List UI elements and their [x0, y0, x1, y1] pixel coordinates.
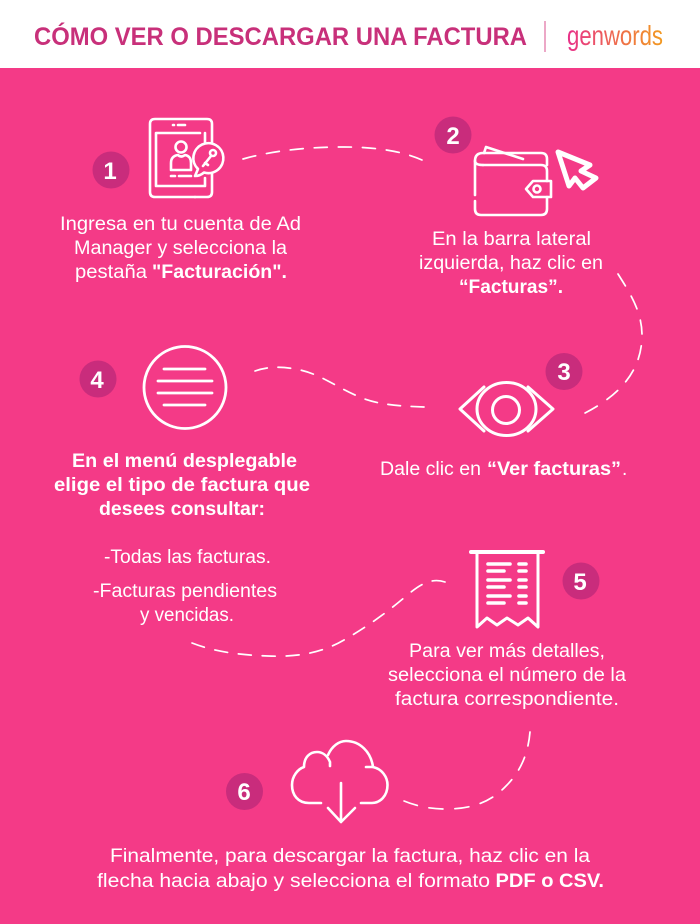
- text step 4 heading: En el menú desplegable: [72, 451, 297, 472]
- dashed connector 1 to 2: [243, 147, 422, 160]
- text step 6: Finalmente, para descargar la factura, haz clic en la: [110, 846, 590, 867]
- text step 4 list: -Todas las facturas.: [104, 547, 271, 568]
- step 4: [54, 346, 310, 626]
- icon: tablet with user and key: [150, 119, 223, 197]
- number badge 5: 5: [573, 569, 587, 596]
- number badge 1: [92, 152, 130, 188]
- title: CÓMO VER O DESCARGAR UNA FACTURA: [34, 21, 527, 51]
- text step 1: [60, 214, 301, 283]
- text step 2: izquierda, haz clic en: [419, 253, 603, 274]
- number badge 3: [546, 353, 582, 390]
- text step 6: [97, 846, 604, 892]
- dashed connector 2 to 3: [585, 274, 642, 413]
- text step 2: [419, 229, 603, 298]
- number badge 6: [226, 773, 263, 810]
- text step 1: pestaña: [75, 262, 147, 283]
- icon: wallet: [475, 147, 551, 215]
- text step 5: Para ver más detalles,: [409, 641, 605, 662]
- number badge 2: 2: [446, 123, 460, 150]
- text step 4 list: y vencidas.: [140, 605, 234, 626]
- text step 4 heading: desees consultar:: [99, 499, 265, 520]
- icon: cloud download: [292, 741, 388, 822]
- text step 6: PDF o CSV.: [496, 871, 604, 892]
- step 2: [419, 116, 603, 298]
- number badge 6: 6: [237, 779, 251, 806]
- text step 1: "Facturación".: [152, 262, 287, 283]
- step 6: [97, 741, 604, 892]
- dashed connector 4 to 5: [192, 581, 445, 656]
- text step 4 heading: elige el tipo de factura que: [54, 475, 310, 496]
- logo: genwords: genwords: [567, 20, 663, 51]
- text step 4 heading: [54, 451, 310, 520]
- icon: menu circle: [144, 346, 226, 428]
- step 5: [388, 552, 626, 710]
- text step 5: [388, 641, 626, 710]
- text step 4 list: -Facturas pendientes: [93, 581, 277, 602]
- dashed connector 3 to 4: [255, 367, 424, 407]
- text step 6: flecha hacia abajo y selecciona el formato: [97, 871, 490, 892]
- text step 3: Dale clic en: [380, 459, 481, 480]
- step 1: [60, 119, 301, 283]
- dashed connector 5 to 6: [404, 732, 530, 809]
- text step 4 list: [93, 547, 277, 626]
- text step 1: Manager y selecciona la: [74, 238, 287, 259]
- text step 3: .: [622, 459, 627, 480]
- text step 1: Ingresa en tu cuenta de Ad: [60, 214, 301, 235]
- number badge 4: [80, 360, 116, 398]
- text step 2: “Facturas”.: [459, 277, 563, 298]
- text step 5: selecciona el número de la: [388, 665, 626, 686]
- step 3: [380, 353, 627, 480]
- text step 5: factura correspondiente.: [395, 689, 619, 710]
- icon: receipt: [471, 552, 543, 627]
- header band: [0, 0, 700, 68]
- number badge 5: [562, 562, 600, 600]
- icon: eye: [460, 382, 553, 436]
- number badge 2: [434, 116, 472, 154]
- icon: cursor: [558, 152, 596, 188]
- number badge 4: 4: [90, 367, 104, 394]
- number badge 3: 3: [557, 359, 571, 386]
- number badge 1: 1: [103, 158, 117, 185]
- text step 3: “Ver facturas”: [487, 459, 621, 480]
- text step 3: [380, 459, 627, 480]
- text step 2: En la barra lateral: [432, 229, 591, 250]
